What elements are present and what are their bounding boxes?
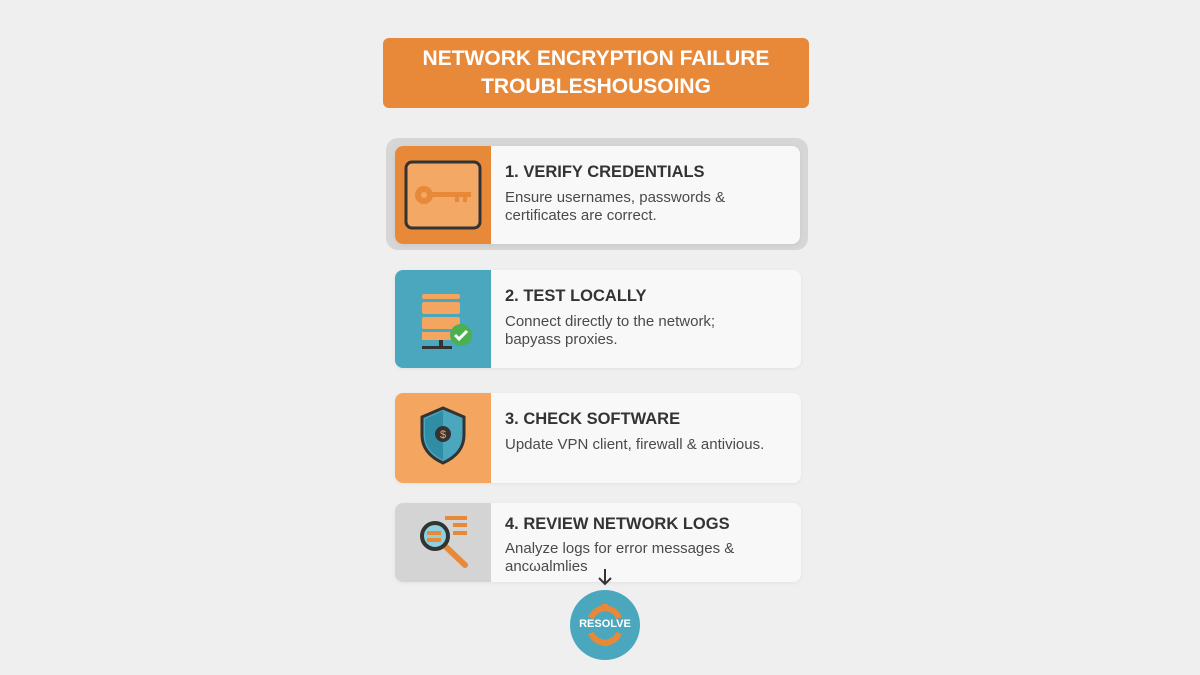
resolve badge: RESOLVE bbox=[579, 618, 631, 630]
card 4: review logs bbox=[395, 503, 801, 582]
card 1: verify credentials bbox=[395, 146, 800, 244]
icon: shield: $ bbox=[440, 429, 446, 441]
card 4: review logs: 4. REVIEW NETWORK LOGS bbox=[505, 515, 730, 533]
icon: key bbox=[395, 146, 491, 244]
resolve badge bbox=[570, 590, 640, 660]
arrow bbox=[598, 569, 612, 586]
card 2: test locally: 2. TEST LOCALLY bbox=[505, 287, 646, 305]
icon: server check bbox=[395, 270, 491, 368]
card 1: verify credentials: 1. VERIFY CREDENTIALS bbox=[505, 163, 705, 181]
card 3: check software: Update VPN client, firewall & antivious. bbox=[505, 436, 764, 453]
card 4: review logs: ancωalmlies bbox=[505, 558, 588, 575]
card 1 highlight border bbox=[386, 138, 808, 250]
card 3: check software: 3. CHECK SOFTWARE bbox=[505, 410, 680, 428]
title: TROUBLESHOUSOING bbox=[481, 75, 711, 98]
card 1: verify credentials: Ensure usernames, passwords & bbox=[505, 189, 725, 206]
card 4: review logs: Analyze logs for error messages & bbox=[505, 540, 734, 557]
title bbox=[383, 38, 809, 108]
card 2: test locally: Connect directly to the network; bbox=[505, 313, 715, 330]
title: NETWORK ENCRYPTION FAILURE bbox=[423, 47, 769, 70]
card 3: check software bbox=[395, 393, 801, 483]
card 2: test locally bbox=[395, 270, 801, 368]
card 1: verify credentials: certificates are correct. bbox=[505, 207, 657, 224]
card 2: test locally: bapyass proxies. bbox=[505, 331, 618, 348]
icon: shield bbox=[395, 393, 491, 483]
icon: magnifier bbox=[395, 503, 491, 582]
